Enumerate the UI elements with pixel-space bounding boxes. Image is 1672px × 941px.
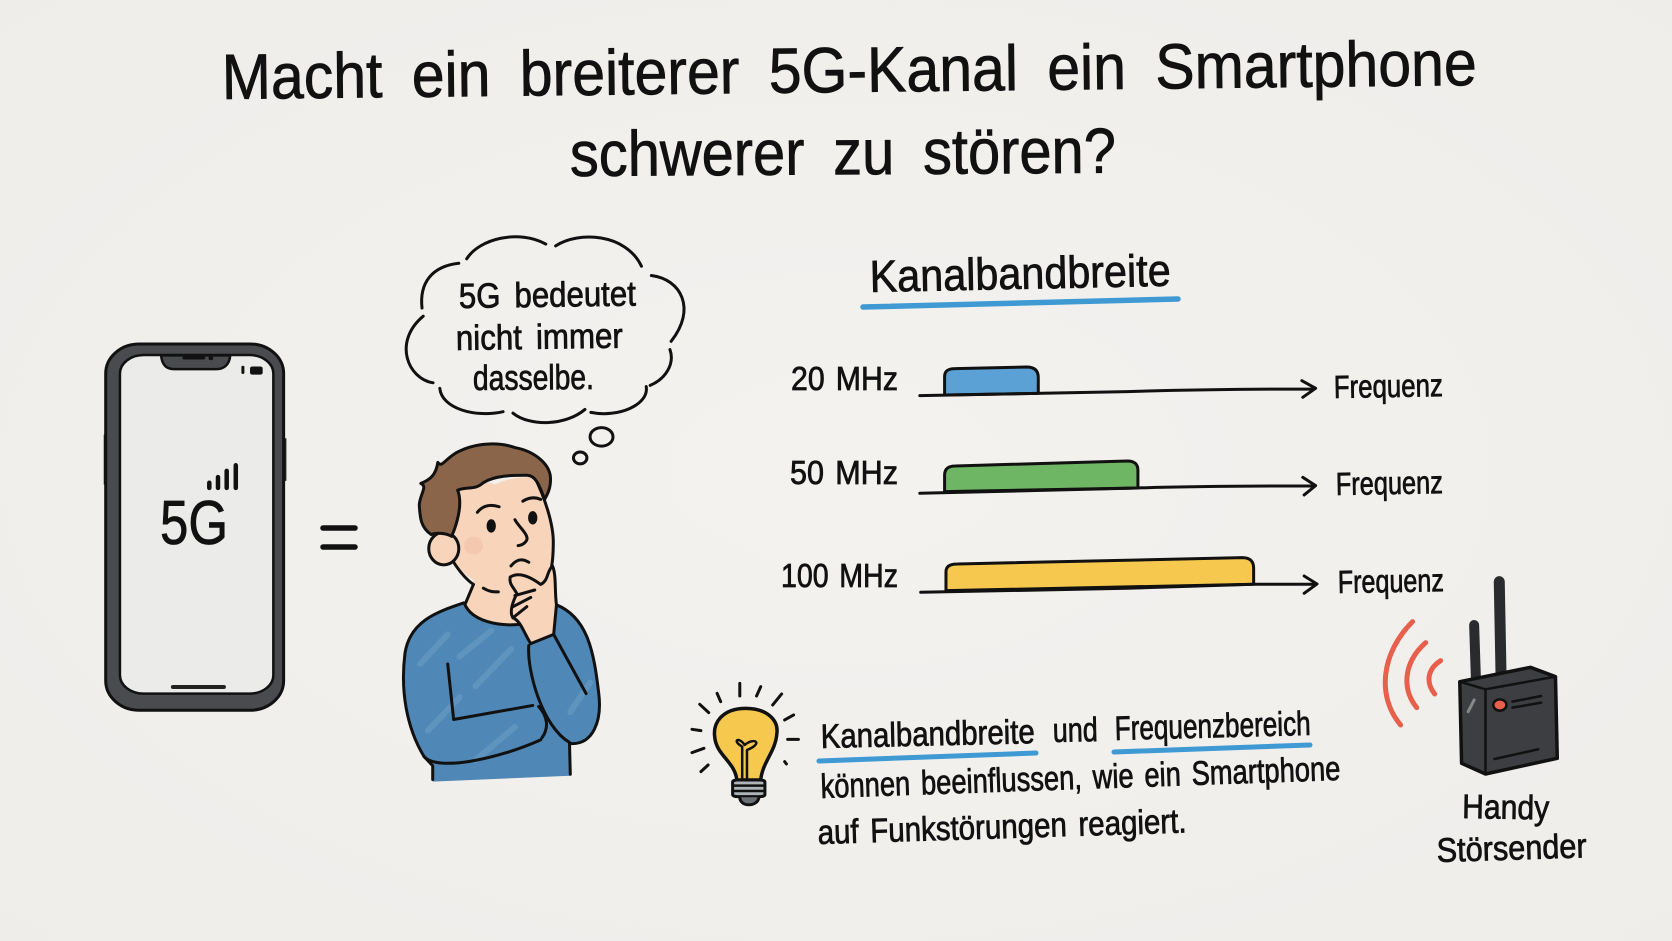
device body	[1460, 667, 1557, 774]
note text: Kanalbandbreite	[820, 713, 1035, 756]
title: Macht ein breiterer 5G-Kanal ein Smartphone	[221, 27, 1477, 113]
frequency labels	[1333, 367, 1444, 600]
hand	[510, 566, 556, 644]
thought bubble text: dasselbe.	[473, 358, 594, 398]
blush	[464, 537, 483, 554]
title: schwerer zu stören?	[570, 115, 1116, 190]
thinking person	[403, 444, 599, 782]
icon: light bulb	[692, 683, 798, 805]
note underlines	[819, 745, 1310, 761]
thought bubble text	[456, 275, 636, 398]
sweater	[403, 603, 599, 782]
bandwidth chart	[920, 367, 1317, 593]
ear	[429, 532, 459, 565]
bar 20 MHz	[945, 367, 1038, 395]
neck	[466, 581, 525, 625]
bandwidth labels: 20 MHz	[791, 360, 898, 397]
arms	[424, 634, 586, 763]
frequency labels: Frequenz	[1337, 562, 1444, 600]
axis 50 MHz	[920, 477, 1316, 495]
frequency labels: Frequenz	[1335, 464, 1443, 502]
equals sign	[323, 528, 355, 547]
signal waves	[1385, 622, 1441, 725]
jammer label: Störsender	[1436, 827, 1587, 870]
face	[454, 477, 553, 594]
bandwidth labels	[781, 360, 898, 594]
facial features	[477, 498, 541, 592]
phone label 5G: 5G	[160, 489, 228, 558]
collar and neck lines	[464, 584, 523, 625]
face outline	[454, 477, 553, 584]
note text	[817, 705, 1341, 852]
axis 100 MHz	[921, 576, 1317, 593]
title	[221, 27, 1477, 190]
frequency labels: Frequenz	[1333, 367, 1443, 405]
sweater texture	[420, 631, 590, 760]
note text: Frequenzbereich	[1114, 705, 1311, 748]
note text: auf Funkstörungen reagiert.	[817, 802, 1187, 852]
fingers	[513, 590, 535, 618]
bandwidth labels: 100 MHz	[781, 557, 898, 594]
axis 20 MHz	[920, 381, 1316, 397]
bar 50 MHz	[945, 461, 1138, 492]
thought bubble	[406, 237, 684, 464]
phone illustration	[104, 344, 286, 710]
bar 100 MHz	[946, 558, 1254, 591]
jammer label	[1436, 788, 1587, 870]
antennas	[1474, 625, 1476, 680]
heading underline	[863, 299, 1178, 307]
note text: und	[1052, 711, 1098, 750]
sweater outline	[403, 603, 599, 779]
bandwidth labels: 50 MHz	[790, 454, 898, 491]
jammer label: Handy	[1462, 788, 1550, 828]
thought bubble text: nicht immer	[456, 317, 623, 358]
note text: können beeinflussen, wie ein Smartphone	[820, 750, 1341, 806]
hair	[419, 444, 551, 536]
icon: jammer device	[1385, 582, 1557, 774]
thought bubble text: 5G bedeutet	[459, 275, 636, 316]
heading Kanalbandbreite: Kanalbandbreite	[869, 245, 1171, 302]
